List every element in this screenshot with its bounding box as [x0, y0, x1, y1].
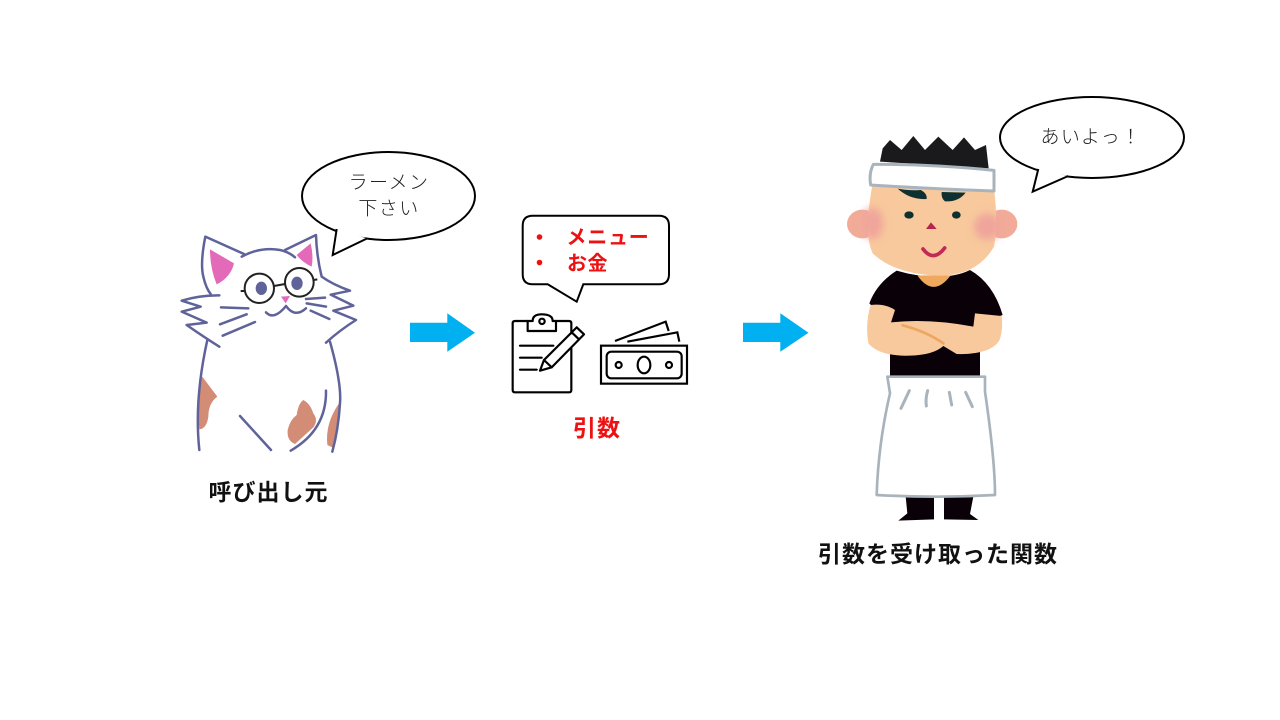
chef shirt: [869, 270, 1003, 377]
chef nose: [926, 222, 937, 229]
chef neck: [917, 275, 951, 287]
speech bubble: argument list: [523, 216, 669, 302]
chef hair: [880, 136, 989, 168]
icon: banknotes: [601, 322, 687, 384]
speech bubble: customer: ラーメン: [349, 172, 429, 194]
chef mouth: [923, 248, 945, 256]
chef headband: [870, 164, 994, 191]
chef ears: [847, 210, 1017, 238]
cat glasses: [241, 268, 317, 303]
chef arms: [867, 305, 1002, 356]
icon: cat with glasses: [182, 235, 356, 452]
chef legs: [898, 497, 978, 521]
label: function receiving arguments: 引数を受け取った関数: [818, 541, 1058, 567]
speech bubble: chef: [1000, 97, 1184, 192]
chef face: [868, 183, 996, 276]
cat brown spots: [198, 377, 339, 447]
cat outline: [182, 235, 356, 452]
arrow: to arguments: [410, 313, 475, 352]
chef eyebrows: [898, 189, 966, 201]
speech bubble: argument list: お金: [567, 252, 608, 275]
speech bubble: customer: [302, 152, 475, 255]
cat eyes: [256, 277, 303, 295]
arrow: to function: [743, 313, 808, 352]
speech bubble: chef: あいよっ！: [1040, 127, 1142, 148]
label: arguments: 引数: [573, 415, 621, 441]
chef eyes: [904, 211, 961, 219]
label: caller: 呼び出し元: [208, 479, 328, 505]
chef arm crease: [903, 325, 943, 343]
chef apron: [877, 377, 995, 497]
chef cheeks: [862, 207, 1001, 240]
icon: ramen chef apron and legs: [877, 377, 995, 521]
icon: ramen chef upper body: [847, 136, 1017, 377]
apron folds: [901, 391, 972, 408]
cat ears inner: [210, 243, 312, 284]
cat nose: [281, 296, 290, 303]
speech bubble: customer: 下さい: [358, 198, 420, 220]
icon: clipboard with pencil: [513, 314, 584, 392]
speech bubble: argument list: メニュー: [566, 227, 650, 249]
